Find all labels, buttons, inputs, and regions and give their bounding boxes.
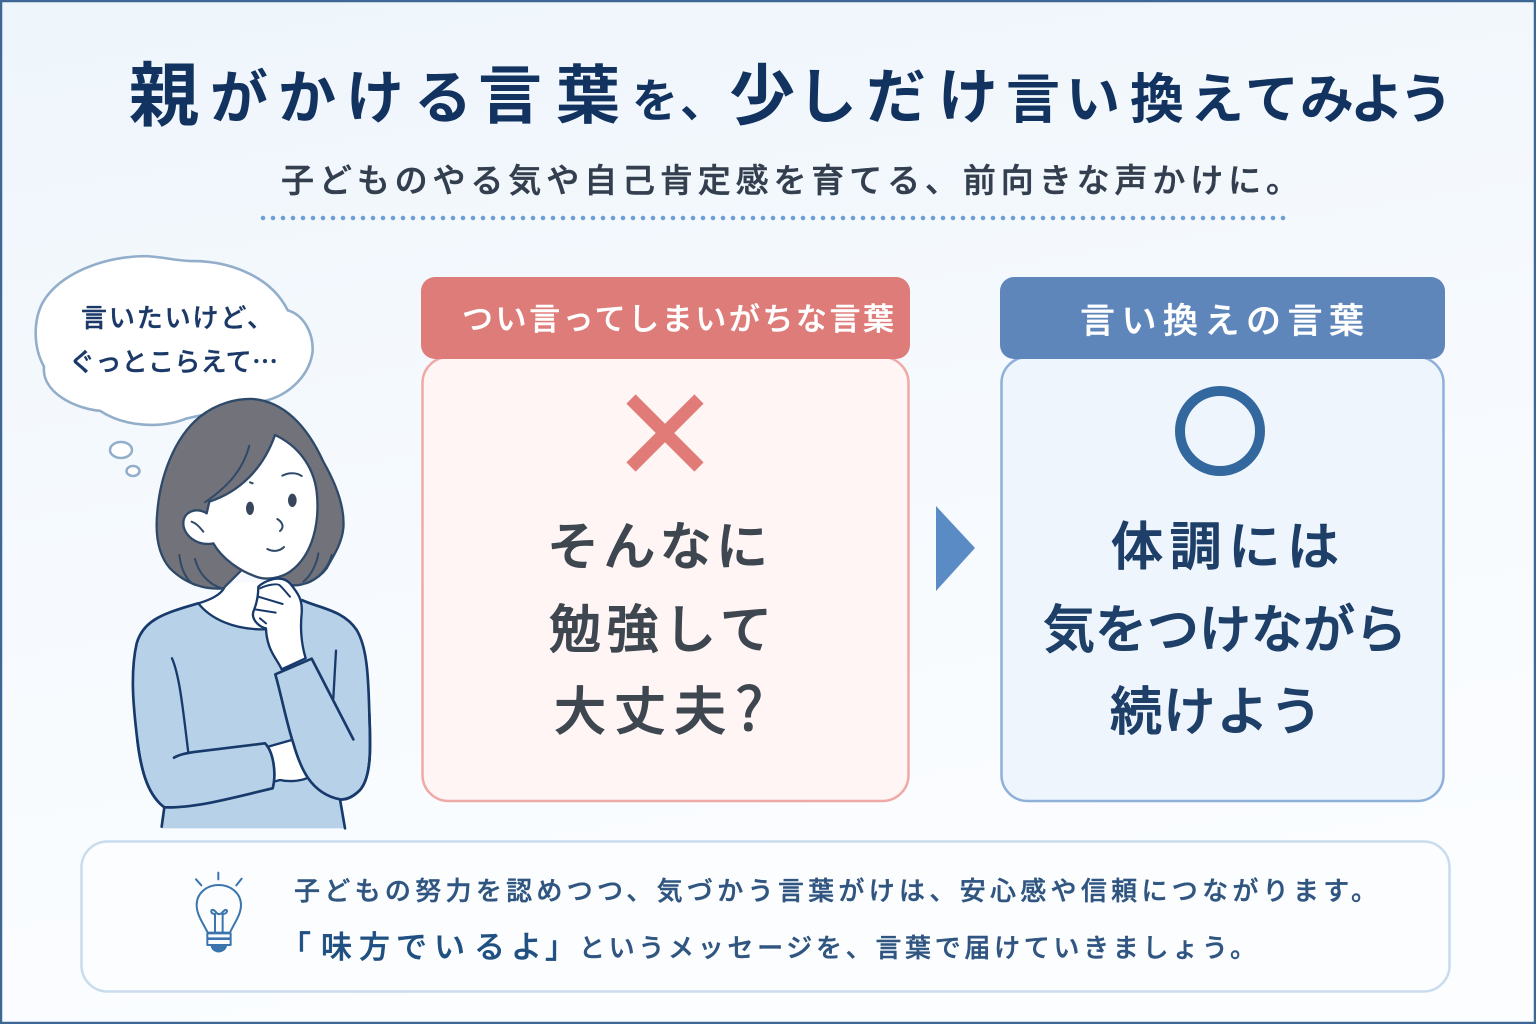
phrase text: 続けよう <box>1110 684 1322 742</box>
panel body <box>422 357 908 801</box>
note text: 子どもの努力を認めつつ、気づかう言葉がけは、安心感や信頼につながります。 <box>294 876 1377 906</box>
note text: というメッセージを、言葉で届けていきましょう。 <box>579 933 1256 963</box>
arms and hands <box>137 579 370 807</box>
note text <box>280 876 1377 967</box>
phrase text: 大丈夫 <box>554 684 726 742</box>
title: 少 <box>729 59 795 133</box>
panel: common phrase <box>421 277 910 801</box>
body <box>133 580 370 828</box>
head <box>157 399 344 589</box>
phrase text: そんなに <box>547 519 768 577</box>
title: がかける <box>210 66 472 131</box>
header text: つい言ってしまいがちな言葉 <box>462 302 894 337</box>
icon: circle <box>1180 391 1260 471</box>
note text: 「味方でいるよ」 <box>280 922 576 967</box>
phrase text: 勉強して <box>549 602 772 660</box>
title: 親 <box>129 57 199 135</box>
title: 言葉 <box>478 60 620 132</box>
person illustration <box>133 399 370 828</box>
phrase text: ? <box>735 661 763 748</box>
panel header <box>421 277 910 359</box>
title <box>129 57 1453 135</box>
thought dots <box>110 442 140 476</box>
icon: cross <box>631 399 699 467</box>
phrase text: 体調には <box>1111 519 1339 577</box>
title: を、 <box>632 75 726 127</box>
phrase text: 気をつけながら <box>1043 602 1407 660</box>
panel: bottom note <box>82 842 1450 992</box>
title: しだけ <box>797 64 998 131</box>
thought bubble <box>36 256 313 425</box>
panel header <box>1000 277 1445 359</box>
header text: 言い換えの言葉 <box>1080 302 1364 341</box>
title: 言い換えてみよう <box>1006 70 1453 130</box>
subtitle: 子どものやる気や自己肯定感を育てる、前向きな声かけに。 <box>281 162 1299 199</box>
icon: light bulb <box>196 873 242 951</box>
phrase text <box>547 519 772 748</box>
panel: rephrased <box>1000 277 1445 801</box>
bubble text: ぐっとこらえて… <box>69 342 278 379</box>
phrase text <box>1043 519 1407 742</box>
bubble text: 言いたいけど、 <box>81 303 273 333</box>
bubble text <box>69 303 278 379</box>
panel body <box>1002 357 1444 801</box>
arrow <box>936 506 975 591</box>
note frame <box>82 842 1450 992</box>
